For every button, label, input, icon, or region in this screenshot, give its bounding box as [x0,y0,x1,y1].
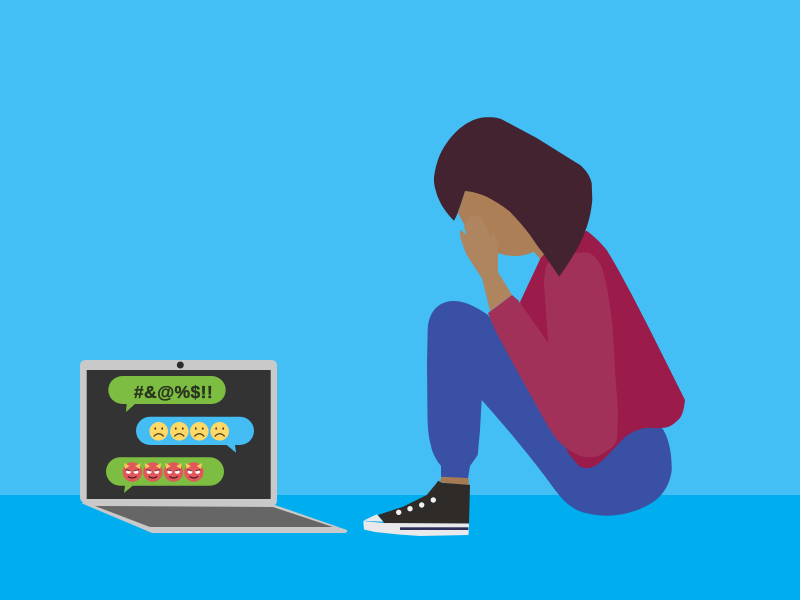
sleeve [488,252,618,457]
icon: sad face [190,422,209,441]
icon: devil face [184,462,204,482]
sneaker upper [378,481,470,524]
person sitting with head in hands [363,117,685,536]
laptop keyboard [95,506,333,527]
sneaker toe cap [363,514,383,522]
laptop base [81,503,347,533]
webcam [177,362,184,368]
sneaker [363,481,470,536]
ankle [440,474,469,486]
sneaker sole stripe [400,527,468,530]
icon: devil face [123,462,142,482]
icon: sad face [170,422,189,441]
laptop lid [80,360,277,506]
message bubble: devil faces [106,457,224,493]
laptop [80,360,347,533]
sneaker sole [363,521,469,536]
laptop screen [87,370,271,499]
forearm [482,272,512,311]
message bubble: sad faces [136,417,254,453]
shirt back [520,231,685,468]
trousers [427,301,672,516]
message bubble: profanity [108,376,226,412]
icon: sad face [149,422,168,441]
icon: sad face [210,422,229,441]
hair [434,117,592,277]
hand [460,216,498,278]
neck [532,244,546,259]
floor [0,495,800,600]
icon: devil face [143,462,163,482]
symbols text: #&@%$!! [134,382,213,402]
face [458,190,541,256]
sneaker eyelets [396,497,436,515]
icon: devil face [164,462,183,482]
